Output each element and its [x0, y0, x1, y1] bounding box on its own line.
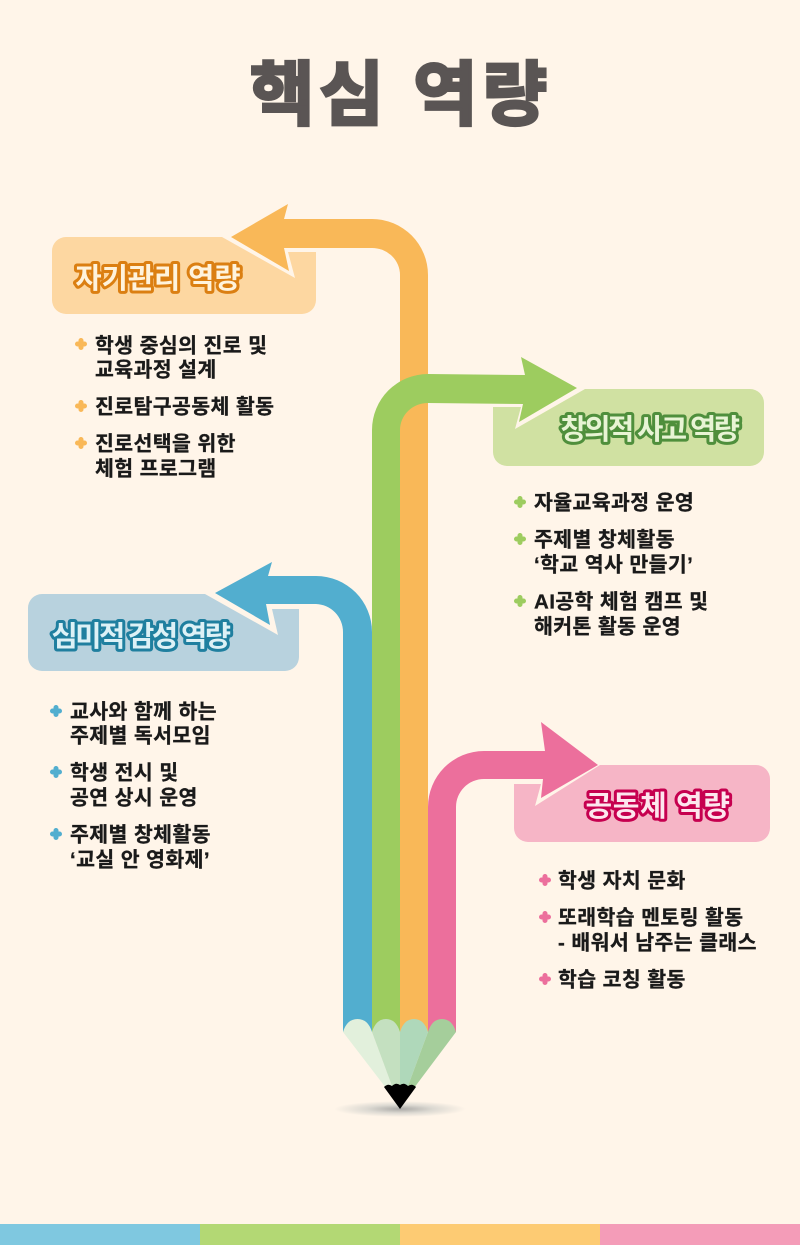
- arrow: pink: [428, 722, 598, 1032]
- arrow: green: [372, 357, 577, 1032]
- pencil tip: [334, 1019, 466, 1117]
- pencil shadow: [334, 1101, 466, 1117]
- list: self-management: [78, 334, 274, 480]
- pencil wood segment 4: [408, 1019, 456, 1088]
- pencil wood segment 2: [372, 1019, 400, 1088]
- pencil wood segment 1: [343, 1019, 392, 1088]
- heading: creative thinking: 창의적 사고 역량: [561, 414, 740, 446]
- list: community: 학습 코칭 활동: [558, 968, 686, 992]
- bullet: [78, 340, 84, 348]
- bullet: [516, 498, 524, 506]
- bullet: [542, 876, 548, 884]
- bullet: [542, 914, 548, 920]
- list: aesthetic sensibility: 주제별 독서모임: [70, 724, 211, 748]
- list: aesthetic sensibility: 공연 상시 운영: [70, 786, 198, 810]
- list: creative thinking: 주제별 창체활동: [534, 528, 675, 552]
- heading: self-management: 자기관리 역량: [75, 263, 241, 295]
- heading: aesthetic sensibility: 심미적 감성 역량: [52, 621, 231, 653]
- bottom colour bar: [0, 1224, 800, 1245]
- panel: self-management label box: [52, 237, 316, 314]
- list: aesthetic sensibility: [52, 700, 217, 872]
- bullet: [516, 598, 524, 604]
- list: creative thinking: ‘학교 역사 만들기’: [534, 554, 693, 576]
- list: self-management: 교육과정 설계: [95, 358, 217, 382]
- panel: creative thinking label box: [493, 389, 764, 466]
- arrow: orange: [231, 204, 428, 1032]
- list: community: [542, 870, 757, 992]
- panel: community label box: [514, 765, 770, 842]
- list: community: - 배워서 남주는 클래스: [558, 932, 757, 954]
- bullet: [542, 976, 548, 982]
- heading: community: 공동체 역량: [585, 790, 731, 823]
- list: self-management: 학생 중심의 진로 및: [95, 334, 267, 358]
- bullet: [52, 768, 60, 776]
- list: creative thinking: [516, 492, 708, 638]
- list: aesthetic sensibility: ‘교실 안 영화제’: [70, 848, 210, 872]
- pencil lead: [384, 1084, 416, 1109]
- pencil wood segment 3: [400, 1019, 428, 1088]
- list: community: 또래학습 멘토링 활동: [558, 906, 744, 930]
- list: self-management: 진로선택을 위한: [95, 432, 236, 456]
- list: creative thinking: AI공학 체험 캠프 및: [534, 590, 708, 614]
- bullet: [78, 440, 84, 446]
- list: aesthetic sensibility: 주제별 창체활동: [70, 824, 211, 846]
- list: self-management: 체험 프로그램: [95, 458, 217, 480]
- list: community: 학생 자치 문화: [558, 870, 686, 892]
- list: creative thinking: 해커톤 활동 운영: [534, 616, 681, 638]
- panel: aesthetic sensibility label box: [28, 594, 299, 671]
- bullet: [516, 536, 524, 542]
- list: aesthetic sensibility: 학생 전시 및: [70, 762, 178, 784]
- bullet: [52, 708, 60, 714]
- bullet: [52, 830, 60, 838]
- arrow: blue: [215, 562, 372, 1032]
- list: self-management: 진로탐구공동체 활동: [95, 396, 274, 418]
- title: 핵심 역량: [250, 56, 552, 134]
- list: aesthetic sensibility: 교사와 함께 하는: [70, 700, 217, 724]
- bullet: [78, 402, 84, 410]
- list: creative thinking: 자율교육과정 운영: [534, 492, 694, 514]
